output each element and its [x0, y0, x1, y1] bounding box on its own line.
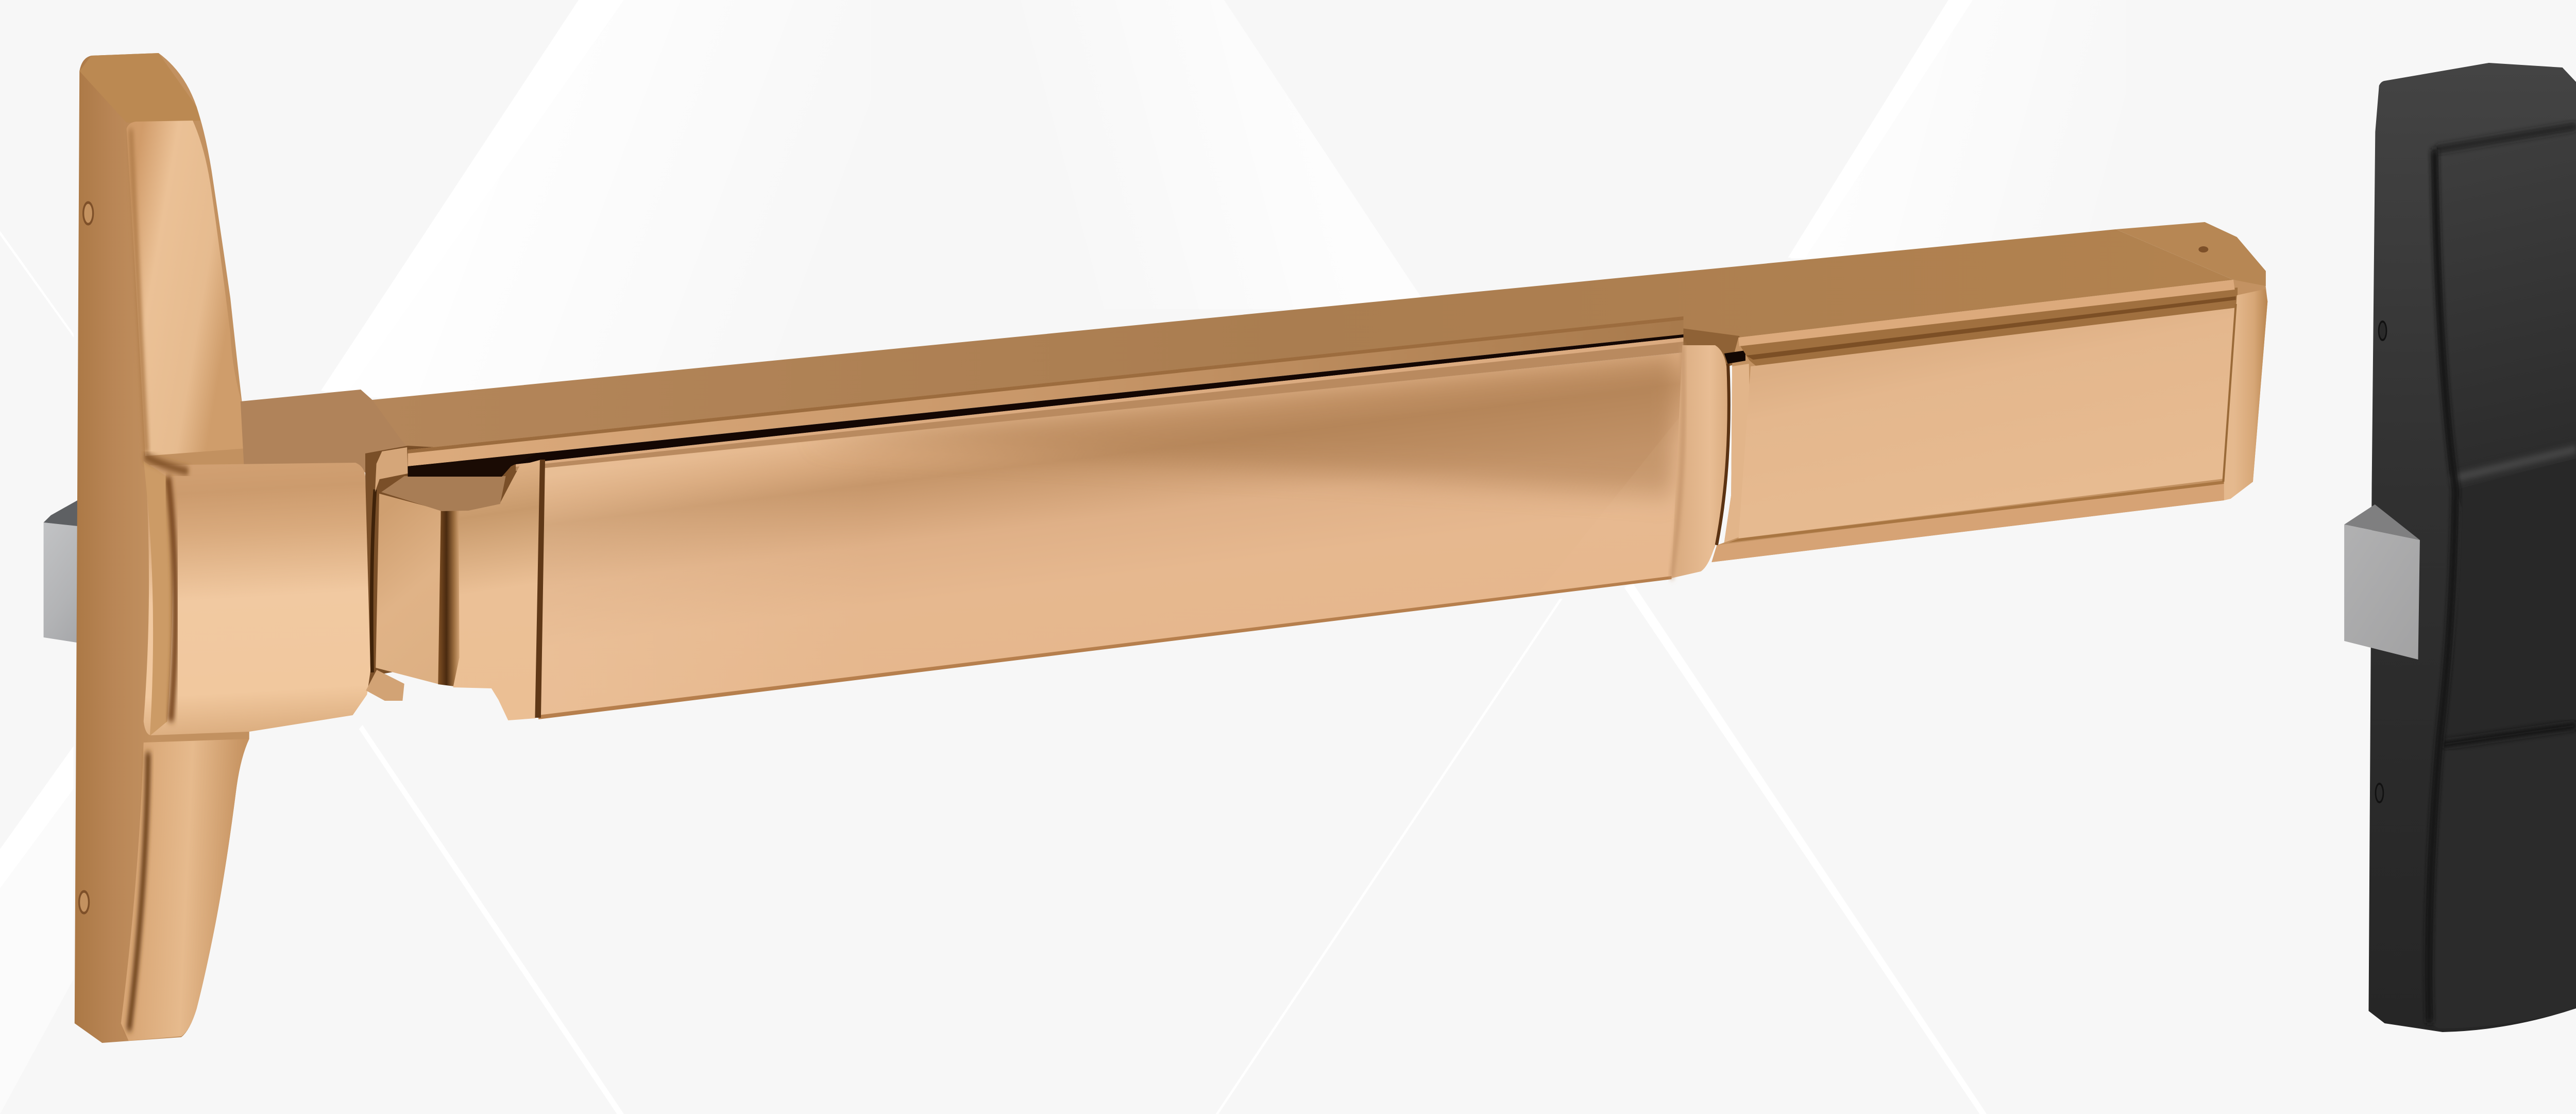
- screw bottom: [79, 891, 89, 913]
- bar top surface: [372, 229, 2233, 453]
- lower black panel: [2430, 733, 2576, 1028]
- upper arm panel: [127, 121, 260, 456]
- middle black panel: [2443, 459, 2576, 737]
- black body: [2368, 63, 2576, 1032]
- bar rail lines: [408, 316, 1683, 476]
- main pad end cap: [1671, 345, 1730, 578]
- chassis body: [144, 463, 370, 735]
- end frame shadow band: [1739, 288, 2238, 369]
- end frame: [1711, 280, 2267, 562]
- collar shadow: [145, 456, 188, 471]
- second pad lower rail: [1711, 482, 2224, 562]
- black device: [2344, 63, 2576, 1032]
- icon: black device latch bolt: [2344, 504, 2420, 660]
- middle ridge highlight: [2450, 449, 2576, 479]
- pad cap seam: [1671, 345, 1683, 578]
- neck and rail backing: [365, 446, 546, 693]
- upper black panel: [2439, 127, 2576, 490]
- right end cap: [2224, 289, 2267, 500]
- lower arm crease: [129, 752, 148, 1031]
- main pad: [538, 352, 1683, 718]
- lower panel gap: [2443, 725, 2576, 745]
- gold panic bar device: [44, 53, 2267, 1043]
- neck connector: [366, 447, 545, 720]
- pad bottom edge: [538, 576, 1671, 719]
- chassis top surface: [241, 390, 407, 477]
- second pad: [1738, 308, 2237, 538]
- cap backing: [1643, 323, 1751, 367]
- upper arm crease: [131, 129, 146, 453]
- screw lower: [2376, 784, 2383, 802]
- top bevel of end plate: [79, 53, 200, 123]
- black gap: [1724, 350, 1745, 364]
- cap small screw: [2198, 246, 2208, 252]
- chassis left collar: [144, 461, 173, 736]
- top panel gap: [2436, 126, 2576, 149]
- side crease: [2429, 149, 2455, 1023]
- screw upper: [2379, 322, 2386, 340]
- frame strip: [1724, 364, 1751, 543]
- end plate: [75, 53, 251, 1043]
- icon: steel latch bolt: [44, 497, 138, 662]
- cap top surface: [2116, 222, 2266, 286]
- screw top: [83, 202, 93, 224]
- lower arm: [121, 739, 249, 1041]
